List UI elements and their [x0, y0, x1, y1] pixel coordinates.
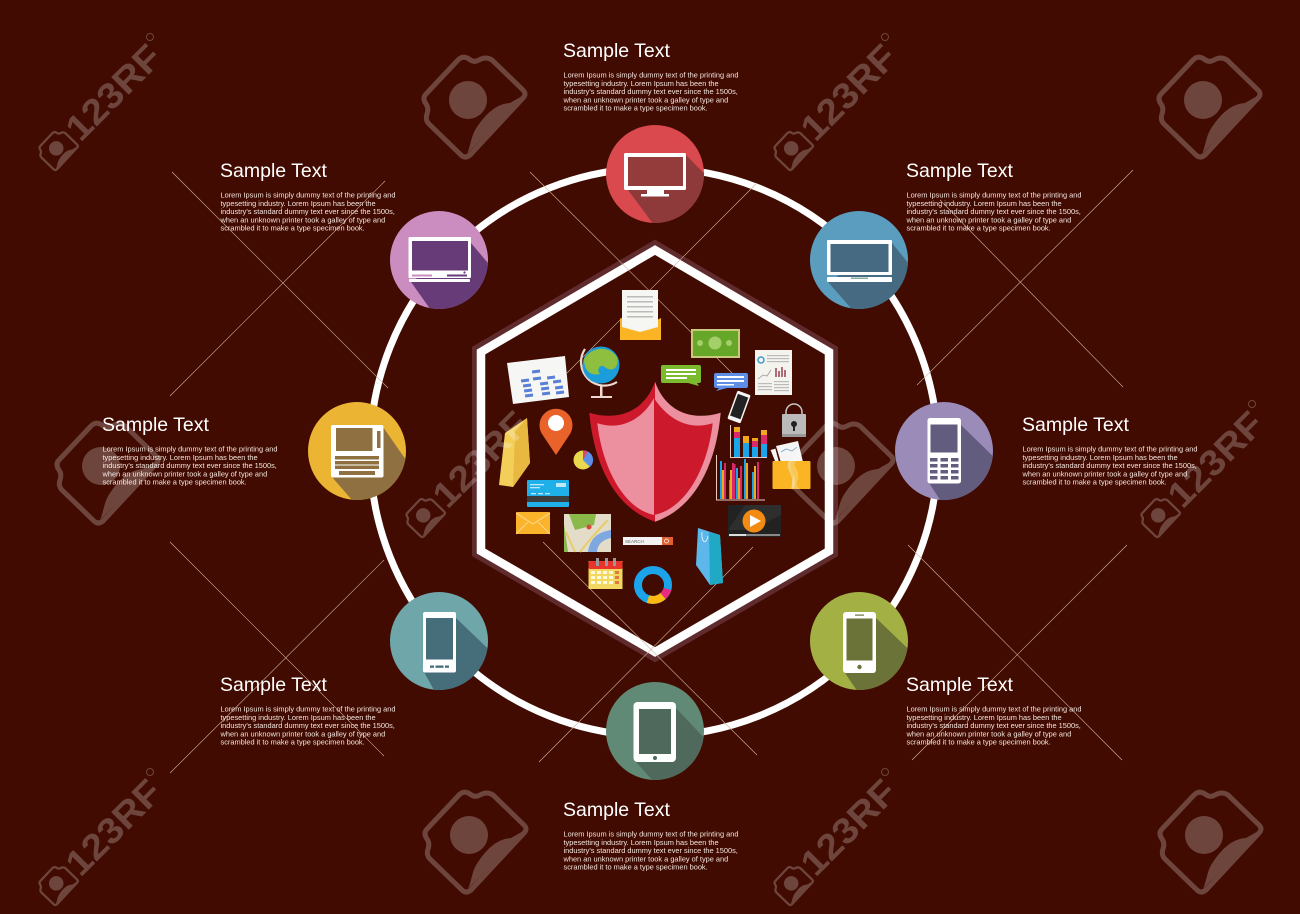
- node: smartphone: [810, 592, 908, 690]
- watermark: top left logo: [40, 34, 170, 170]
- text block: bottom: scrambled it to make a type specimen book.: [564, 862, 708, 872]
- icon: padlock: [782, 404, 806, 437]
- text block: top: industry's standard dummy text ever since the 1500s,: [564, 87, 738, 96]
- icon: small smartphone: [727, 391, 751, 423]
- watermark: bottom right logo: [774, 768, 905, 905]
- text block: lower left: scrambled it to make a type specimen book.: [220, 738, 365, 746]
- text block: bottom: typesetting industry. Lorem Ipsum has been the: [564, 838, 719, 847]
- watermark: middle centre logo: [406, 403, 537, 537]
- icon: orange envelope: [516, 512, 550, 534]
- node: laptop: [810, 211, 908, 309]
- icon: donut chart: [638, 570, 668, 600]
- text block: left: when an unknown printer took a galley of type and: [102, 469, 267, 478]
- text block: left: Sample Text: [102, 414, 210, 436]
- text block: upper right: [906, 160, 1081, 232]
- watermark: middle left egg: [57, 423, 158, 523]
- watermark: middle far-right logo: 123RF: [1159, 403, 1272, 516]
- text block: upper right: Sample Text: [906, 160, 1014, 182]
- watermark: middle far-right logo: [1142, 400, 1272, 537]
- text block: top: when an unknown printer took a galley of type and: [562, 95, 728, 104]
- watermark: top left logo: 123RF: [57, 36, 170, 149]
- icon: blue shopping bag: [696, 528, 723, 585]
- text block: upper right: scrambled it to make a type specimen book.: [906, 224, 1051, 232]
- text block: right: when an unknown printer took a galley of type and: [1022, 469, 1187, 478]
- icon: organisation chart sheet: [507, 356, 569, 404]
- icon: report page: [755, 350, 792, 395]
- icon: folder with papers: [771, 441, 810, 489]
- watermark: bottom centre egg: [425, 792, 526, 892]
- icon: letter in envelope: [620, 290, 661, 340]
- icon: search bar: [623, 537, 673, 545]
- icon: calendar: [588, 558, 622, 589]
- node: touch phone: [390, 592, 488, 690]
- text block: upper left: Sample Text: [220, 160, 328, 182]
- text block: lower right: Lorem Ipsum is simply dummy text of the printing and: [906, 704, 1081, 714]
- text block: lower left: when an unknown printer took a galley of type and: [220, 729, 385, 738]
- text block: left: typesetting industry. Lorem Ipsum has been the: [102, 453, 258, 462]
- text block: lower right: industry's standard dummy text ever since the 1500s,: [906, 721, 1081, 730]
- icon: gold shopping bag: [499, 418, 530, 487]
- text block: upper left: scrambled it to make a type specimen book.: [220, 224, 365, 232]
- icon: map pin: [540, 409, 572, 455]
- text block: right: Sample Text: [1022, 414, 1130, 436]
- text block: top: Lorem Ipsum is simply dummy text of the printing and: [564, 70, 738, 80]
- text block: bottom: when an unknown printer took a galley of type and: [562, 854, 728, 863]
- text block: lower left: industry's standard dummy text ever since the 1500s,: [220, 721, 395, 730]
- shield: [589, 382, 721, 522]
- central hexagon: [481, 250, 829, 652]
- watermark: top right logo: [774, 34, 905, 170]
- text block: upper left: Lorem Ipsum is simply dummy text of the printing and: [220, 190, 395, 200]
- text block: right: typesetting industry. Lorem Ipsum has been the: [1022, 453, 1178, 462]
- thin crossing lines: [170, 170, 1133, 773]
- text block: bottom: Lorem Ipsum is simply dummy text of the printing and: [564, 830, 738, 838]
- watermark: top far-right egg: [1159, 57, 1260, 157]
- text block: upper right: when an unknown printer took a galley of type and: [906, 215, 1071, 224]
- node: all-in-one computer: [390, 211, 488, 309]
- text block: upper left: [220, 160, 395, 232]
- icon: lower bar chart: [716, 455, 765, 500]
- node: handheld with keyboard: [308, 402, 406, 500]
- icon: search bar: SEARCH: [625, 539, 644, 544]
- text block: left: scrambled it to make a type specimen book.: [102, 478, 247, 486]
- text block: left: [102, 414, 277, 486]
- text block: bottom: [562, 799, 738, 872]
- text block: upper right: typesetting industry. Lorem Ipsum has been the: [906, 199, 1062, 208]
- node: tablet: [606, 682, 704, 780]
- text block: left: industry's standard dummy text ever since the 1500s,: [102, 461, 277, 470]
- text block: lower left: [220, 674, 395, 746]
- icon: street map: [564, 514, 611, 552]
- text block: lower left: typesetting industry. Lorem Ipsum has been the: [220, 713, 376, 722]
- text block: upper right: Lorem Ipsum is simply dummy text of the printing and: [906, 190, 1081, 200]
- text block: right: Lorem Ipsum is simply dummy text of the printing and: [1022, 444, 1197, 454]
- text block: lower right: [906, 674, 1081, 746]
- watermark: middle right egg: [792, 423, 893, 523]
- icon: video player: [728, 505, 781, 537]
- text block: bottom: industry's standard dummy text ever since the 1500s,: [564, 846, 738, 855]
- outer ring: [370, 168, 938, 736]
- watermark: top right logo: 123RF: [792, 36, 905, 149]
- text block: top: [562, 40, 738, 112]
- watermark: top centre egg: [424, 57, 525, 157]
- text block: upper right: industry's standard dummy text ever since the 1500s,: [906, 207, 1081, 216]
- text block: bottom: Sample Text: [563, 799, 671, 821]
- text block: top: Sample Text: [563, 40, 671, 62]
- watermark: middle centre logo: 123RF: [424, 403, 537, 516]
- text block: lower right: when an unknown printer took a galley of type and: [906, 729, 1071, 738]
- icon: banknote: [691, 329, 740, 358]
- text block: lower right: typesetting industry. Lorem Ipsum has been the: [906, 713, 1062, 722]
- watermark: bottom far-right egg: [1160, 792, 1261, 892]
- text block: lower right: Sample Text: [906, 674, 1014, 696]
- watermark: bottom left logo: 123RF: [57, 771, 170, 884]
- icon: globe: [581, 346, 620, 398]
- icon: credit card: [527, 480, 569, 507]
- text block: lower right: scrambled it to make a type specimen book.: [906, 738, 1051, 746]
- text block: top: typesetting industry. Lorem Ipsum has been the: [564, 79, 719, 88]
- icon: blue speech bubble: [714, 373, 748, 391]
- icon: upper bar chart: [730, 425, 767, 458]
- text block: lower left: Lorem Ipsum is simply dummy text of the printing and: [220, 704, 395, 714]
- text block: upper left: typesetting industry. Lorem Ipsum has been the: [220, 199, 376, 208]
- node: keypad phone: [895, 402, 993, 500]
- node: desktop monitor: [606, 125, 704, 223]
- text block: left: Lorem Ipsum is simply dummy text of the printing and: [102, 444, 277, 454]
- text block: lower left: Sample Text: [220, 674, 328, 696]
- watermark: bottom left logo: [40, 768, 170, 905]
- text block: top: scrambled it to make a type specimen book.: [564, 104, 708, 112]
- watermark: bottom right logo: 123RF: [792, 771, 905, 884]
- text block: upper left: when an unknown printer took a galley of type and: [220, 215, 385, 224]
- text block: right: scrambled it to make a type specimen book.: [1022, 478, 1167, 486]
- text block: upper left: industry's standard dummy text ever since the 1500s,: [220, 207, 395, 216]
- text block: right: industry's standard dummy text ever since the 1500s,: [1022, 461, 1197, 470]
- icon: green speech bubble: [661, 365, 701, 386]
- icon: small pie chart: [574, 450, 593, 470]
- text block: right: [1022, 414, 1197, 486]
